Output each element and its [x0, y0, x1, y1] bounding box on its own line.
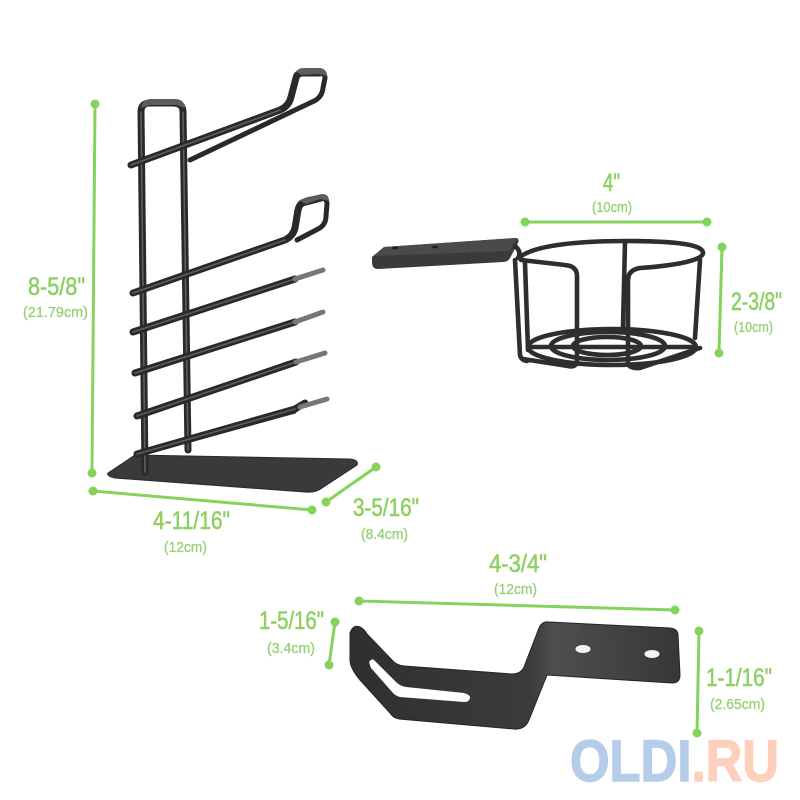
dimension: rack height: [23, 100, 100, 478]
fifth arm: [137, 353, 325, 416]
bracket mounting hole left: [576, 645, 590, 653]
sixth arm: [137, 399, 327, 454]
dimension: cup holder height: 2-3/8": [731, 288, 782, 316]
dimension: cup holder width: [520, 169, 712, 226]
dimension: bracket length: 4-3/4": [489, 550, 547, 578]
dimension: rack height: 8-5/8": [28, 273, 85, 301]
top hook arm: [131, 68, 327, 165]
dimension: rack width: 4-11/16": [153, 507, 230, 535]
dimension: rack depth: 3-5/16": [353, 494, 419, 522]
dimension: rack width: [88, 486, 316, 556]
dimension: cup holder width: (10cm): [592, 199, 632, 216]
product: Z-shaped bracket: [350, 622, 680, 729]
dimension: rack depth: [322, 462, 419, 543]
cup holder base spirals: [528, 329, 696, 365]
dimension: bracket plate height: 1-1/16": [706, 664, 772, 692]
bracket mounting hole right: [644, 650, 660, 658]
dimension: cup holder height: (10cm): [734, 319, 773, 336]
third arm: [133, 270, 323, 332]
cup holder mounting plate: [372, 238, 519, 269]
product: cup holder: [372, 238, 703, 368]
dimension: bracket plate height: (2.65cm): [710, 696, 765, 713]
bracket slot: [369, 659, 470, 702]
dimension: rack width: (12cm): [164, 539, 207, 556]
dimension: rack height: (21.79cm): [23, 304, 88, 321]
dimension: cup holder width: 4": [603, 169, 620, 197]
watermark: OLDI.RU: OLDI.RU: [570, 729, 779, 794]
cup holder wire cage: [515, 241, 703, 368]
rack base plate: [108, 455, 357, 492]
second hook arm: [133, 194, 329, 293]
product: layered rack stand: [108, 68, 357, 492]
dimension: bracket hook height: 1-5/16": [259, 607, 324, 635]
dimension: bracket plate height: [692, 626, 772, 738]
dimension: bracket length: [354, 550, 680, 614]
rack upright frame: [141, 99, 188, 472]
dimension: bracket hook height: (3.4cm): [267, 640, 315, 657]
dimension: cup holder height: [714, 242, 782, 358]
dimension: rack depth: (8.4cm): [361, 526, 408, 543]
fourth arm: [135, 312, 323, 373]
dimension: bracket hook height: [259, 607, 340, 670]
dimension: bracket length: (12cm): [494, 581, 537, 598]
